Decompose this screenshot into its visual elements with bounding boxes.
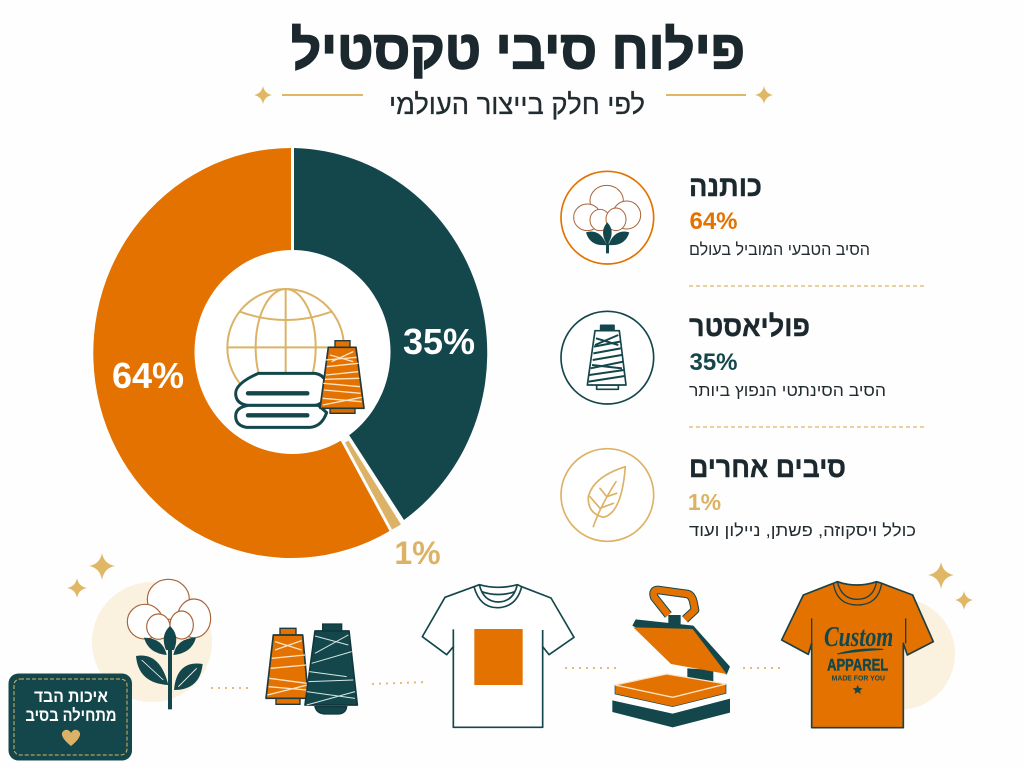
base <box>612 698 730 727</box>
globe <box>227 289 344 406</box>
description: הסיב הטבעי המוביל בעולם <box>689 240 870 259</box>
divider <box>689 426 924 428</box>
label 1%: 1% <box>394 535 441 571</box>
percentage: 1% <box>688 489 721 515</box>
heading: סיבים אחרים <box>689 452 846 484</box>
subtitle ornaments <box>254 86 773 104</box>
shirt print text: Custom <box>824 622 893 653</box>
dark spool <box>305 624 357 714</box>
icon: globe, towels and spool <box>227 289 364 427</box>
icon: heat press <box>612 590 730 727</box>
slice: polyester 35% <box>294 148 487 520</box>
description: כולל ויסקוזה, פשתן, ניילון ועוד <box>689 521 916 540</box>
description: הסיב הסינתטי הנפוץ ביותר <box>689 381 886 400</box>
folded towels <box>236 373 327 427</box>
label 64%: 64% <box>112 355 184 396</box>
sparkles left <box>67 553 115 598</box>
slice: cotton 64% <box>93 148 390 558</box>
subtitle: לפי חלק בייצור העולמי <box>389 89 645 120</box>
label 35%: 35% <box>403 321 475 362</box>
heart <box>62 730 80 746</box>
legend item: cotton <box>561 171 870 264</box>
title: פילוח סיבי טקסטיל <box>291 20 745 80</box>
icon: cotton plant <box>127 579 211 709</box>
percentage: 35% <box>689 349 738 376</box>
icon: two spools <box>266 624 357 714</box>
donut hole <box>194 250 390 454</box>
background circle left <box>92 582 212 702</box>
divider <box>689 285 924 287</box>
percentage: 64% <box>689 208 738 235</box>
icon: printed orange t-shirt: APPAREL <box>827 656 888 675</box>
icon: spool in ring <box>561 311 654 404</box>
icon: printed orange t-shirt: MADE FOR YOU <box>832 674 885 683</box>
icon: printed orange t-shirt <box>782 582 933 728</box>
slice: other fibers 1% <box>345 440 401 530</box>
heading: כותנה <box>689 171 762 203</box>
donut chart <box>93 148 487 571</box>
background circle right <box>843 598 955 710</box>
print area <box>474 629 523 685</box>
quality badge: מתחילה בסיב <box>26 706 116 725</box>
orange spool <box>266 628 308 704</box>
orange spool <box>320 341 364 413</box>
badge text: איכות הבד <box>34 687 108 706</box>
legend item: other fibers <box>561 449 916 541</box>
handle <box>654 590 695 619</box>
icon: blank t-shirt with print area <box>422 585 574 727</box>
heading: פוליאסטר <box>689 311 810 343</box>
upper plate <box>632 619 730 675</box>
legend item: polyester <box>561 311 886 404</box>
icon: leaf in ring <box>561 449 654 541</box>
icon: cotton boll in ring <box>561 171 654 264</box>
connector dots <box>211 668 782 688</box>
sparkles right <box>928 562 973 610</box>
quality badge <box>8 674 132 760</box>
